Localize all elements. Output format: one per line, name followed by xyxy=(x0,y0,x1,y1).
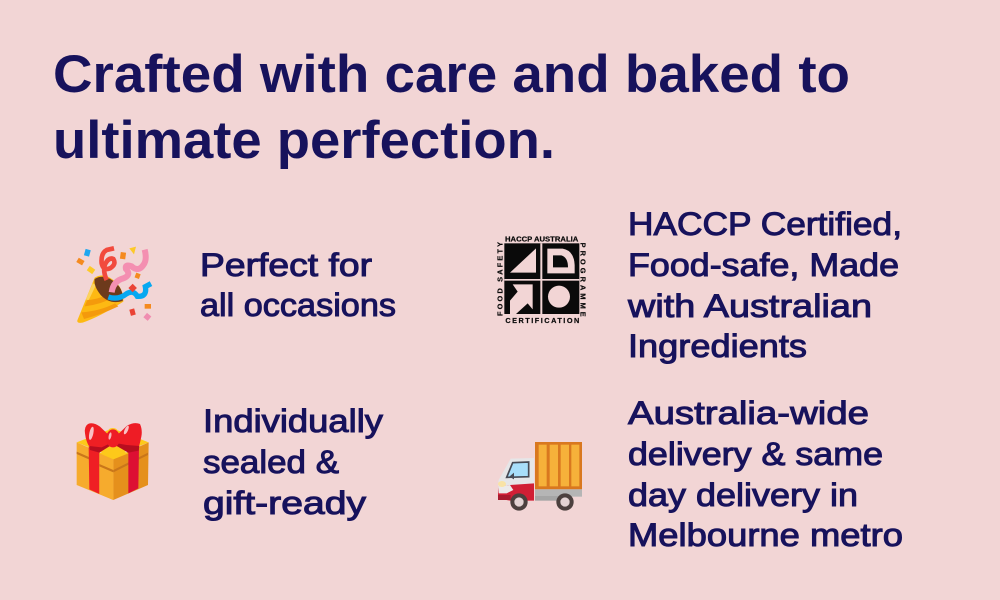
title xyxy=(53,45,850,170)
feature: HACCP certified xyxy=(496,206,902,364)
icon: party popper xyxy=(76,247,151,323)
icon: HACCP Australia certification badge: HACCP AUSTRALIA xyxy=(505,234,579,243)
icon: HACCP Australia certification badge: CERTIFICATION xyxy=(505,316,579,325)
icon: HACCP Australia certification badge: FOOD SAFETY xyxy=(496,242,505,316)
text: HACCP certified xyxy=(627,206,902,364)
text: individually sealed and gift-ready: Individually xyxy=(203,403,383,439)
text: HACCP certified: Food-safe, Made xyxy=(628,247,899,283)
feature: perfect for all occasions xyxy=(76,247,396,323)
text: delivery details: Melbourne metro xyxy=(628,517,903,553)
text: delivery details: day delivery in xyxy=(628,477,858,513)
title: Crafted with care and baked to xyxy=(53,45,850,104)
text: individually sealed and gift-ready xyxy=(203,403,383,521)
title: ultimate perfection. xyxy=(53,111,555,170)
text: delivery details: delivery & same xyxy=(628,436,883,472)
icon: gift box xyxy=(77,423,149,500)
text: delivery details: Australia-wide xyxy=(628,395,869,431)
text: HACCP certified: with Australian xyxy=(627,288,872,324)
text: perfect for all occasions: Perfect for xyxy=(200,247,372,283)
text: individually sealed and gift-ready: gift-ready xyxy=(203,485,366,521)
icon: HACCP Australia certification badge: PROGRAMME xyxy=(579,243,588,317)
text: HACCP certified: Ingredients xyxy=(628,328,807,364)
text: HACCP certified: HACCP Certified, xyxy=(628,206,902,242)
text: individually sealed and gift-ready: sealed & xyxy=(203,444,339,480)
text: delivery details xyxy=(628,395,903,553)
icon: delivery truck xyxy=(498,442,582,511)
text: perfect for all occasions: all occasions xyxy=(200,287,396,323)
feature: individually sealed xyxy=(77,403,383,521)
feature: delivery xyxy=(498,395,903,553)
text: perfect for all occasions xyxy=(200,247,396,323)
icon: HACCP Australia certification badge xyxy=(496,234,588,325)
